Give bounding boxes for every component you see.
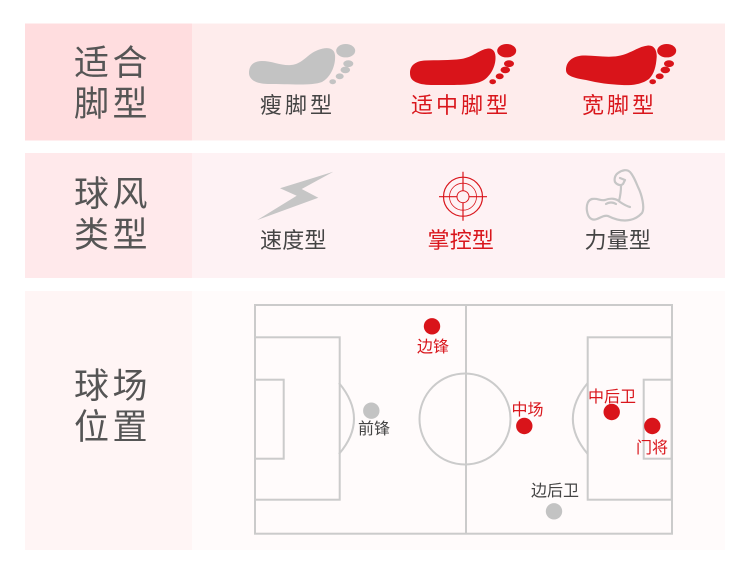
- heading: play style: [74, 175, 151, 255]
- heading: suitable foot type: [74, 44, 151, 124]
- label: wide foot: 宽脚型: [582, 93, 657, 118]
- label: speed type: 速度型: [260, 228, 327, 253]
- heading: play style: 类型: [74, 216, 151, 255]
- marker: full back: 边后卫: [531, 482, 579, 500]
- label: medium foot: 适中脚型: [411, 93, 511, 118]
- label: power type: 力量型: [584, 228, 651, 253]
- panel: field position: [25, 291, 725, 550]
- marker: goalkeeper: [636, 418, 668, 457]
- icon: lightning bolt: [257, 172, 333, 220]
- icon: red medium foot: [410, 44, 516, 85]
- marker: goalkeeper: 门将: [636, 439, 668, 457]
- heading: suitable foot type: 脚型: [74, 85, 151, 124]
- marker: midfielder: 中场: [512, 401, 544, 419]
- label: slim foot: 瘦脚型: [260, 93, 335, 118]
- icon: gray slim foot: [249, 44, 355, 84]
- marker: midfielder: [512, 401, 544, 434]
- heading: field position: 球场: [74, 367, 151, 406]
- label: control type: 掌控型: [428, 228, 494, 253]
- heading: field position: [74, 367, 151, 447]
- panel: play style: [25, 153, 725, 278]
- marker: winger: 边锋: [417, 338, 449, 356]
- heading: field position: 位置: [74, 408, 151, 447]
- diagram: football pitch: [255, 305, 672, 534]
- icon: flexed arm: [587, 170, 643, 220]
- marker: forward: 前锋: [358, 420, 390, 438]
- panel: suitable foot type: [25, 24, 725, 140]
- marker: winger: [417, 318, 449, 356]
- icon: target crosshair: [439, 172, 487, 221]
- heading: suitable foot type: 适合: [74, 44, 151, 83]
- marker: full back: [531, 482, 579, 520]
- heading: play style: 球风: [74, 175, 151, 214]
- marker: centre back: [588, 388, 636, 420]
- marker: centre back: 中后卫: [588, 388, 636, 406]
- marker: forward: [358, 402, 390, 438]
- icon: red wide foot: [566, 44, 676, 85]
